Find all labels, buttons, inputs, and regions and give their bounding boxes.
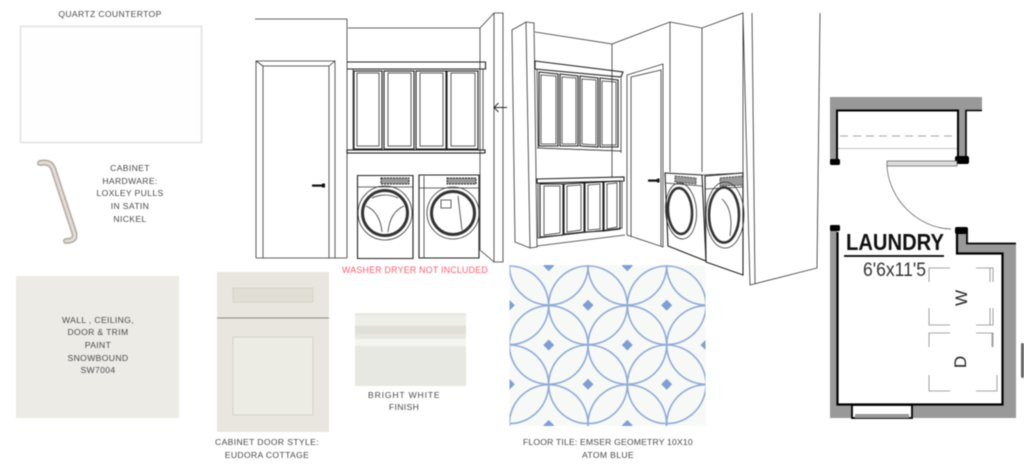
text: cabinet hardware: LOXLEY PULLS [96, 188, 164, 198]
swatch: bright white finish [355, 313, 466, 386]
text: paint: SW7004 [80, 365, 116, 375]
text: paint: WALL , CEILING, [62, 315, 134, 325]
text: floor tile: FLOOR TILE: EMSER GEOMETRY 10X10 [523, 437, 693, 447]
text: paint: SNOWBOUND [68, 353, 128, 363]
swatch: quartz [20, 26, 202, 142]
washer [358, 176, 413, 258]
text: cabinet hardware: CABINET [110, 163, 150, 173]
panel: finish sample [355, 313, 466, 412]
appliance: dryer footprint [929, 333, 997, 391]
door swing [887, 161, 957, 229]
panel: paint swatch [16, 276, 179, 418]
appliance: dryer footprint: D [951, 356, 970, 368]
text: cabinet hardware: HARDWARE: [102, 176, 158, 186]
text: paint: DOOR & TRIM [68, 327, 128, 337]
door [627, 64, 663, 247]
appliance: washer footprint: W [952, 290, 971, 306]
icon: satin nickel pull [40, 163, 75, 241]
arrow: view direction [494, 103, 507, 112]
room label: 6'6x11'5 [863, 260, 926, 281]
text: floor tile: ATOM BLUE [582, 450, 634, 460]
text: door style: CABINET DOOR STYLE: [215, 437, 319, 447]
floor plan [830, 97, 1016, 418]
text: cabinet hardware: NICKEL [113, 214, 147, 224]
wall outline [255, 13, 503, 262]
upper cabinets [347, 62, 486, 153]
dryer [419, 175, 479, 258]
text: finish: BRIGHT WHITE [368, 390, 440, 400]
walls [512, 13, 820, 285]
text: door style: EUDORA COTTAGE [225, 450, 309, 460]
lower cabinets [537, 177, 624, 238]
panel: cabinet hardware [40, 163, 164, 241]
heading: quartz countertop: QUARTZ COUNTERTOP [58, 9, 162, 19]
washer [664, 173, 706, 261]
walls: laundry room [830, 225, 1016, 418]
text: finish: FINISH [389, 402, 419, 412]
door [256, 61, 347, 258]
room label [844, 229, 944, 281]
swatch: geometric floor tile [508, 264, 706, 427]
closet shelf lines [838, 136, 957, 148]
icon: shaker cabinet door [217, 272, 329, 432]
panel: quartz countertop [20, 9, 202, 142]
text: washer dryer note: WASHER DRYER NOT INCLUDED [342, 265, 488, 275]
walls: upper closet [830, 97, 982, 165]
elevation sketch: front view [255, 13, 503, 262]
swatch: snowbound [16, 276, 179, 418]
perspective sketch: angled view [512, 13, 820, 285]
appliance: washer footprint [929, 268, 993, 325]
text: cabinet hardware: IN SATIN [111, 201, 149, 211]
dryer [702, 173, 744, 275]
panel: cabinet door style [215, 272, 329, 460]
scrollbar [1021, 343, 1024, 378]
upper cabinets [535, 61, 623, 153]
panel: floor tile [508, 264, 706, 459]
text: paint: PAINT [85, 340, 112, 350]
room label: LAUNDRY [846, 229, 944, 255]
